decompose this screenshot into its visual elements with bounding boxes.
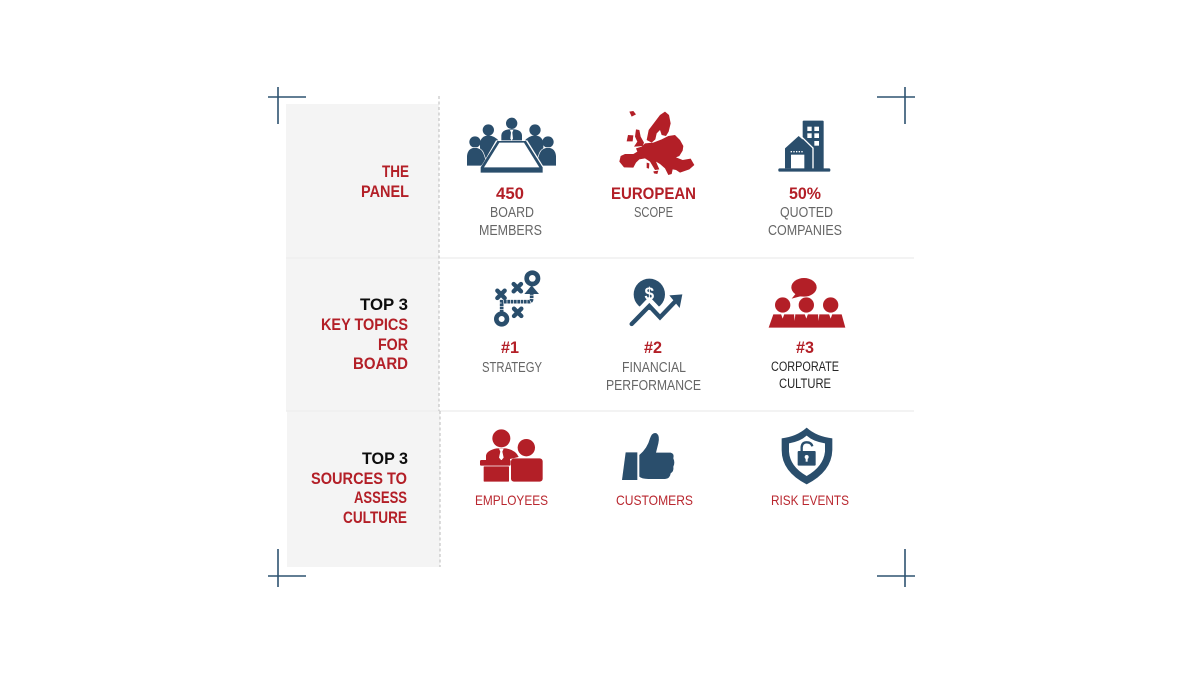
heading: the panel: THE [382, 162, 409, 181]
icon: security shield with padlock [782, 428, 832, 484]
icon: map of Europe [619, 111, 694, 175]
icon: employees [480, 429, 543, 482]
stat: 50% quoted companies: QUOTED [780, 205, 833, 221]
heading: top 3 key topics for board: BOARD [353, 354, 408, 373]
stat: European scope: EUROPEAN [611, 184, 696, 203]
label: employees: EMPLOYEES [475, 492, 548, 508]
item: #1 strategy: #1 [501, 338, 519, 357]
corner crosshair: top right [877, 87, 915, 124]
label: customers: CUSTOMERS [616, 492, 693, 508]
item: #2 financial performance: #2 [644, 338, 662, 357]
heading: top 3 key topics for board [321, 295, 408, 373]
item: #2 financial performance [606, 338, 701, 394]
corner crosshair: bottom right [877, 549, 915, 587]
stat: 50% quoted companies [768, 184, 842, 239]
corner crosshair: bottom left [268, 549, 306, 587]
item: #1 strategy [482, 338, 542, 376]
stat: 450 board members [479, 184, 542, 239]
heading: top 3 sources to assess culture: SOURCES TO [311, 469, 407, 488]
icon: people in conversation [769, 278, 845, 328]
heading: top 3 key topics for board: FOR [378, 335, 408, 354]
item: #3 corporate culture: CULTURE [779, 376, 831, 391]
item: #1 strategy: STRATEGY [482, 360, 542, 376]
heading: top 3 sources to assess culture: TOP 3 [362, 449, 408, 468]
heading: top 3 key topics for board: KEY TOPICS [321, 315, 408, 334]
icon: strategy play diagram [496, 273, 539, 324]
icon: thumbs up [622, 433, 674, 480]
label: risk events: RISK EVENTS [771, 492, 849, 508]
stat: 450 board members: BOARD [490, 205, 534, 221]
stat: 50% quoted companies: 50% [789, 184, 821, 203]
icon: financial growth: $ [645, 284, 655, 304]
heading: top 3 sources to assess culture [311, 449, 408, 527]
item: #2 financial performance: FINANCIAL [622, 360, 686, 376]
icon: financial growth [627, 279, 682, 327]
item: #3 corporate culture [771, 338, 839, 391]
icon: company buildings [778, 121, 830, 172]
heading: top 3 sources to assess culture: CULTURE [343, 508, 407, 527]
stat: European scope: SCOPE [634, 205, 673, 221]
stat: 450 board members: MEMBERS [479, 223, 542, 239]
item: #3 corporate culture: #3 [796, 338, 814, 357]
heading: the panel: PANEL [361, 182, 409, 201]
heading: top 3 key topics for board: TOP 3 [360, 295, 408, 314]
icon: boardroom table [467, 118, 556, 173]
stat: 50% quoted companies: COMPANIES [768, 223, 842, 239]
item: #2 financial performance: PERFORMANCE [606, 378, 701, 394]
heading: the panel [361, 162, 409, 201]
corner crosshair: top left [268, 87, 306, 124]
stat: 450 board members: 450 [496, 184, 524, 203]
stat: European scope [611, 184, 696, 221]
item: #3 corporate culture: CORPORATE [771, 359, 839, 374]
heading: top 3 sources to assess culture: ASSESS [354, 488, 407, 507]
panel: left label column [286, 104, 440, 567]
